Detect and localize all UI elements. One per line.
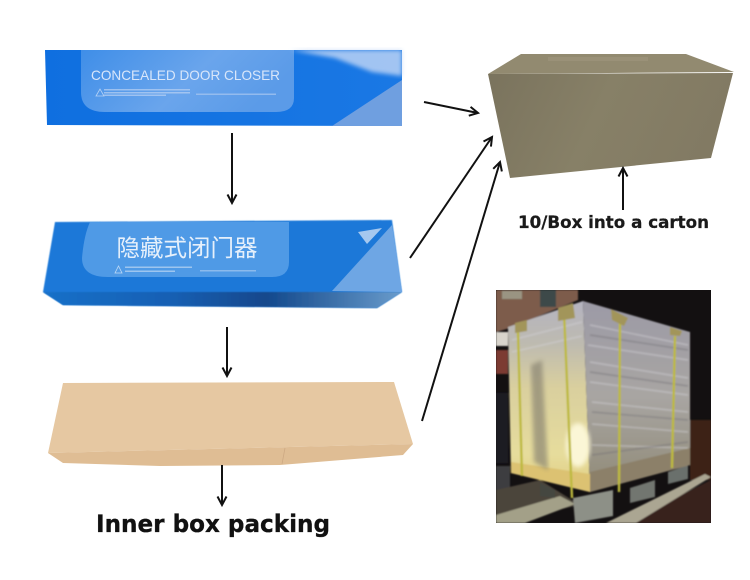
product name: CONCEALED DOOR CLOSER	[91, 67, 280, 83]
label panel	[81, 50, 294, 112]
dark wrap folds	[590, 335, 688, 455]
yellow straps	[518, 312, 675, 498]
arrow: caption to carton	[622, 168, 624, 210]
caption: carton: 10/Box into a carton	[518, 213, 709, 233]
wrap sheen	[512, 322, 688, 448]
wrapped left face	[508, 301, 590, 492]
warning note	[115, 266, 256, 273]
right ground	[690, 420, 711, 480]
carton top	[488, 54, 734, 74]
box: concealed door closer, Chinese	[43, 220, 402, 308]
warning note	[96, 89, 276, 96]
arrow: box 2 to carton	[410, 137, 492, 258]
arrow: box 3 to carton	[422, 162, 500, 421]
photo: wrapped pallet	[496, 290, 711, 523]
carton front	[488, 73, 733, 178]
label panel	[82, 222, 289, 277]
corner protectors	[515, 303, 682, 336]
wrapped right face	[583, 301, 690, 492]
building	[496, 290, 578, 332]
caption: inner box: Inner box packing	[96, 510, 330, 538]
light spot	[566, 423, 590, 467]
glossy reflection	[290, 50, 402, 76]
emblem	[358, 228, 382, 244]
arrow: box 3 to caption	[221, 465, 223, 505]
corner triangle	[332, 80, 402, 126]
infographic: packing flow	[42, 48, 734, 538]
carton	[488, 54, 734, 178]
box: concealed door closer, English	[45, 50, 402, 126]
arrow: box 1 to box 2	[231, 133, 233, 203]
pallet feet	[573, 490, 613, 523]
arrow: box 2 to box 3	[226, 327, 228, 376]
arrow: box 1 to carton	[424, 102, 478, 113]
carton base	[511, 462, 590, 492]
front side	[48, 444, 413, 466]
dark shadow stripe	[531, 360, 548, 470]
street lights	[496, 332, 508, 346]
product name: 隐藏式闭门器	[116, 235, 258, 261]
left track	[496, 479, 574, 516]
corner triangle	[332, 225, 402, 292]
front side	[43, 292, 402, 308]
box: plain inner box	[48, 382, 413, 466]
